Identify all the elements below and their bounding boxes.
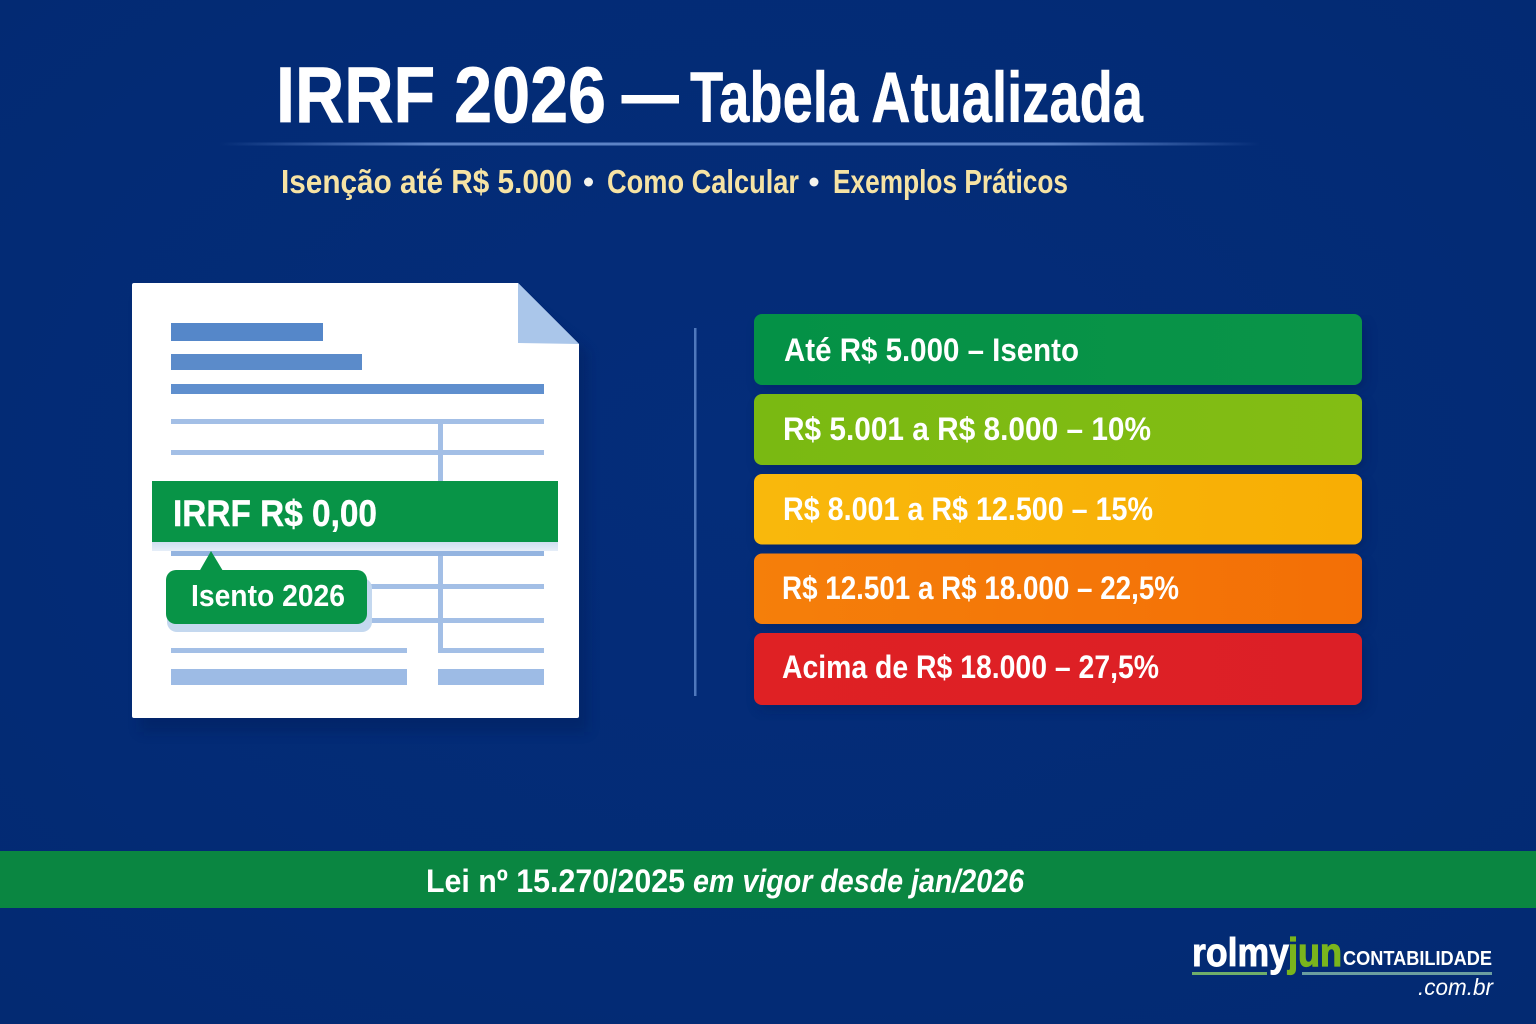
subtitle: Exemplos Práticos xyxy=(833,163,1068,200)
logo: rolmyjun contabilidade: .com.br xyxy=(1418,974,1494,1000)
subtitle: Como Calcular xyxy=(607,163,799,200)
green result band: IRRF R$ 0,00 xyxy=(173,493,377,534)
bracket: 22,5% xyxy=(754,554,1366,629)
footer band: law note: Lei nº 15.270/2025 xyxy=(426,863,685,899)
panel: document with IRRF result xyxy=(132,283,588,732)
bracket: 27,5%: Acima de R$ 18.000 – 27,5% xyxy=(782,649,1159,685)
title xyxy=(276,50,1143,139)
callout: Isento 2026 xyxy=(166,551,372,632)
logo: rolmyjun contabilidade xyxy=(1192,931,1494,1000)
callout: Isento 2026: Isento 2026 xyxy=(191,578,345,613)
logo: rolmyjun contabilidade: CONTABILIDADE xyxy=(1343,948,1492,970)
document table lines xyxy=(171,323,544,685)
panel: tax brackets xyxy=(754,314,1366,710)
bracket: exempt xyxy=(754,314,1366,390)
document sheet xyxy=(132,283,588,732)
green result band xyxy=(152,481,558,556)
bracket: 10%: R$ 5.001 a R$ 8.000 – 10% xyxy=(783,411,1151,447)
logo: rolmyjun contabilidade: jun xyxy=(1287,931,1342,975)
logo: rolmyjun contabilidade: rolmy xyxy=(1192,931,1290,975)
bracket: 10% xyxy=(754,394,1366,470)
subtitle: Isenção até R$ 5.000 xyxy=(281,163,572,200)
title: IRRF 2026 xyxy=(276,50,606,139)
bracket: exempt: Até R$ 5.000 – Isento xyxy=(784,332,1079,368)
bracket: 27,5% xyxy=(754,633,1366,710)
bracket: 15%: R$ 8.001 a R$ 12.500 – 15% xyxy=(783,491,1153,527)
footer band: law note: em vigor desde jan/2026 xyxy=(693,863,1024,899)
footer band: law note xyxy=(0,851,1536,908)
bracket: 22,5%: R$ 12.501 a R$ 18.000 – 22,5% xyxy=(782,570,1179,606)
bracket: 15% xyxy=(754,474,1366,549)
title: Tabela Atualizada xyxy=(690,59,1143,138)
vertical divider xyxy=(694,328,696,696)
subtitle xyxy=(220,142,1260,200)
